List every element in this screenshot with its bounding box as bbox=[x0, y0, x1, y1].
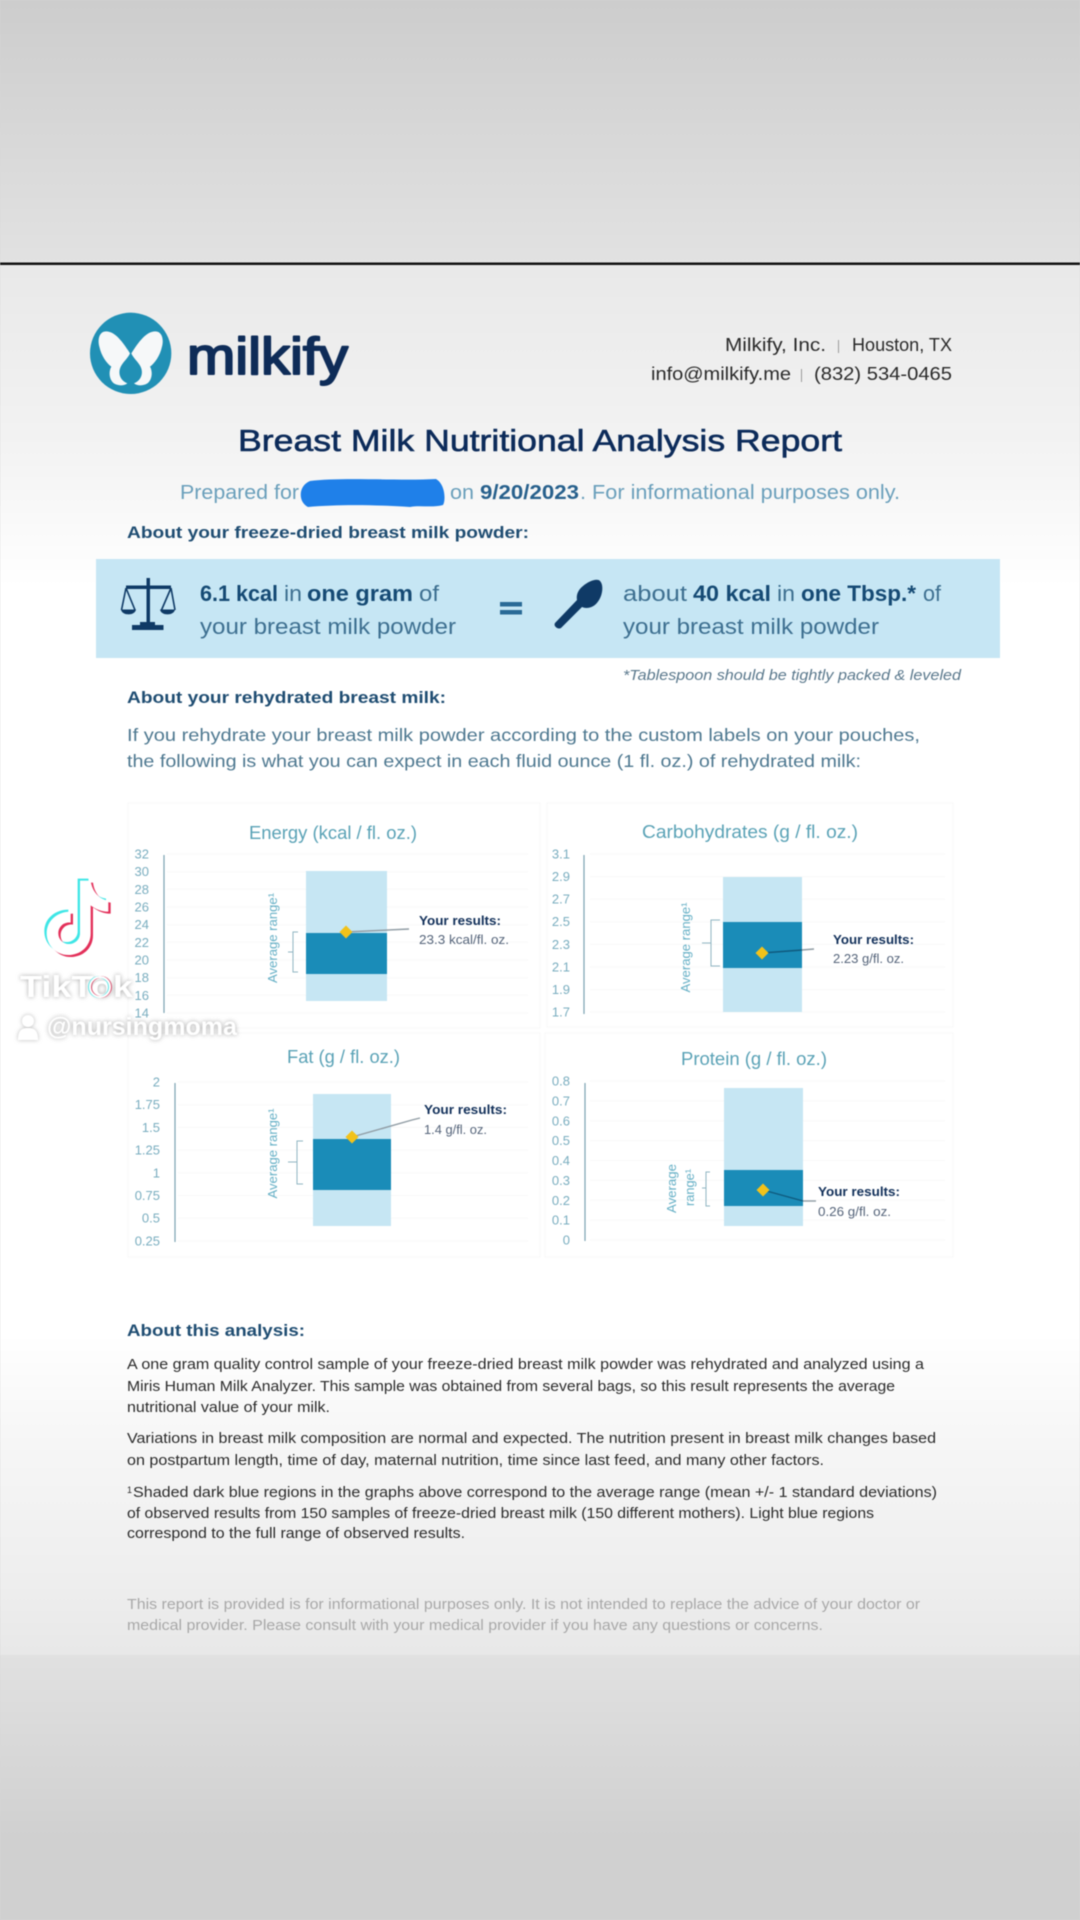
y axis labels bbox=[552, 846, 584, 1020]
text: per tablespoon: one Tbsp.* bbox=[801, 581, 916, 606]
TikTok wordmark: TikTok bbox=[20, 969, 134, 1004]
average range bar bbox=[723, 922, 802, 968]
average range label bbox=[266, 893, 298, 983]
panel: protein chart bbox=[545, 1033, 953, 1257]
your result marker bbox=[346, 1103, 507, 1144]
panel: energy chart bbox=[128, 803, 540, 1028]
y axis labels: 30 bbox=[135, 864, 149, 879]
heading: powder: About your freeze-dried breast milk powder: bbox=[127, 523, 529, 542]
average range label bbox=[679, 902, 720, 992]
analysis paragraph 2: on postpartum length, time of day, maternal nutrition, time since last feed, and many other factors. bbox=[127, 1453, 824, 1469]
prepared for line: 9/20/2023 bbox=[480, 482, 579, 504]
y axis labels bbox=[135, 1074, 175, 1248]
average range label: Average bbox=[665, 1164, 679, 1213]
y axis labels: 1.25 bbox=[135, 1142, 160, 1158]
y axis labels bbox=[135, 846, 164, 1020]
full range bar bbox=[313, 1094, 391, 1226]
y axis labels: 2.9 bbox=[552, 869, 570, 884]
your result marker bbox=[756, 933, 914, 966]
icon: TikTok o ring bbox=[89, 977, 111, 997]
y axis labels: 26 bbox=[135, 900, 149, 914]
contact details: Milkify, Inc. bbox=[725, 335, 826, 355]
icon: spoon bbox=[555, 580, 602, 629]
analysis footnote: correspond to the full range of observed results. bbox=[127, 1526, 465, 1542]
intro paragraph: the following is what you can expect in each fluid ounce (1 fl. oz.) of rehydrated milk: bbox=[127, 751, 861, 771]
tablespoon footnote: *Tablespoon should be tightly packed & leveled bbox=[623, 668, 962, 684]
intro paragraph: If you rehydrate your breast milk powder according to the custom labels on your pouches, bbox=[127, 725, 920, 745]
y axis labels: 3.1 bbox=[552, 846, 570, 862]
average range bar bbox=[724, 1170, 803, 1206]
disclaimer bbox=[127, 1597, 920, 1634]
prepared for line: on bbox=[450, 482, 474, 504]
y axis labels: 24 bbox=[135, 917, 149, 932]
y axis labels: 0.25 bbox=[135, 1234, 160, 1248]
average range label: range¹ bbox=[683, 1169, 697, 1206]
your result marker: Your results: bbox=[833, 933, 914, 947]
wordmark: milkify bbox=[187, 328, 348, 386]
y axis labels: 0.5 bbox=[552, 1133, 570, 1148]
contact details: info@milkify.me bbox=[651, 364, 791, 384]
text: per gram bbox=[200, 581, 456, 639]
text: per gram: your breast milk powder bbox=[200, 614, 456, 639]
text: per gram: of bbox=[419, 581, 440, 606]
y axis labels: 14 bbox=[135, 1006, 149, 1020]
chart title: Fat (g / fl. oz.) bbox=[287, 1047, 400, 1067]
y axis labels: 0.4 bbox=[552, 1153, 570, 1168]
y axis labels: 20 bbox=[135, 952, 149, 968]
panel: carbohydrates chart bbox=[547, 803, 953, 1027]
analysis footnote: Shaded dark blue regions in the graphs above correspond to the average range (mean +/- 1 standard deviations) bbox=[133, 1485, 937, 1501]
icon: scales bbox=[121, 578, 175, 630]
text: per gram: 6.1 kcal bbox=[200, 581, 278, 606]
your result marker: 1.4 g/fl. oz. bbox=[424, 1123, 487, 1137]
y axis labels: 2.7 bbox=[552, 892, 570, 906]
contact details: (832) 534-0465 bbox=[814, 364, 952, 384]
y axis labels: 16 bbox=[135, 988, 149, 1003]
top gray band bbox=[0, 0, 1080, 263]
your result marker bbox=[756, 1184, 900, 1219]
analysis footnote: of observed results from 150 samples of freeze-dried breast milk (150 different mothers). Light blue regions bbox=[127, 1506, 874, 1522]
y axis labels: 1 bbox=[153, 1166, 160, 1180]
average range label: Average range¹ bbox=[679, 903, 693, 992]
full range bar bbox=[724, 1088, 803, 1226]
text: per tablespoon: your breast milk powder bbox=[623, 614, 879, 639]
chart title: Energy (kcal / fl. oz.) bbox=[249, 823, 417, 843]
analysis footnote: 1 bbox=[127, 1485, 132, 1495]
text: per tablespoon bbox=[623, 581, 942, 639]
analysis paragraph 2: Variations in breast milk composition are normal and expected. The nutrition present in breast milk changes based bbox=[127, 1431, 936, 1447]
text: per gram: one gram bbox=[307, 581, 413, 606]
prepared for line bbox=[180, 479, 900, 507]
your result marker bbox=[340, 914, 509, 947]
your result marker: Your results: bbox=[424, 1103, 507, 1117]
bottom gray band bbox=[0, 1655, 1080, 1920]
title: Breast Milk Nutritional Analysis Report bbox=[238, 423, 842, 458]
y axis labels: 2 bbox=[153, 1074, 160, 1090]
y axis labels: 0.3 bbox=[552, 1173, 570, 1188]
chart title: Carbohydrates (g / fl. oz.) bbox=[642, 822, 858, 842]
contact details: Houston, TX bbox=[852, 335, 952, 355]
document page background bbox=[0, 265, 1080, 1655]
analysis paragraph 1: nutritional value of your milk. bbox=[127, 1400, 330, 1416]
y axis labels: 2.5 bbox=[552, 914, 570, 929]
y axis labels: 32 bbox=[135, 846, 149, 862]
analysis paragraph 1 bbox=[127, 1357, 925, 1416]
full range bar bbox=[306, 871, 387, 1001]
text: per tablespoon: of bbox=[923, 581, 942, 606]
average range label: Average range¹ bbox=[266, 893, 280, 983]
average range label bbox=[665, 1164, 710, 1213]
average range bar bbox=[306, 933, 387, 974]
text: per tablespoon: in bbox=[777, 581, 795, 606]
analysis paragraph 1: A one gram quality control sample of your freeze-dried breast milk powder was rehydrated and analyzed using a bbox=[127, 1357, 925, 1373]
your result marker: 23.3 kcal/fl. oz. bbox=[419, 933, 509, 947]
your result marker: Your results: bbox=[419, 914, 501, 928]
average range label bbox=[266, 1108, 303, 1198]
y axis labels: 0.75 bbox=[135, 1188, 160, 1203]
y axis labels: 1.75 bbox=[135, 1097, 160, 1112]
chart title: Protein (g / fl. oz.) bbox=[681, 1049, 827, 1069]
average range label: Average range¹ bbox=[266, 1109, 280, 1198]
y axis labels: 1.9 bbox=[552, 982, 570, 997]
y axis labels: 0.5 bbox=[142, 1210, 160, 1226]
watermark: TikTok bbox=[18, 879, 238, 1041]
icon: TikTok note bbox=[44, 879, 111, 957]
panel: fat chart bbox=[128, 1033, 540, 1257]
prepared for line: Prepared for bbox=[180, 482, 299, 504]
top black rule bbox=[0, 262, 1080, 265]
icon: user bbox=[18, 1015, 38, 1040]
y axis labels: 0.8 bbox=[552, 1074, 570, 1088]
icon: equals sign bbox=[500, 602, 522, 614]
y axis labels: 1.7 bbox=[552, 1004, 570, 1020]
full range bar bbox=[723, 877, 802, 1012]
y axis labels: 0 bbox=[563, 1232, 570, 1248]
analysis paragraph 2 bbox=[127, 1431, 936, 1469]
icon: butterfly circle bbox=[90, 313, 171, 394]
y axis labels: 0.2 bbox=[552, 1193, 570, 1208]
disclaimer: medical provider. Please consult with your medical provider if you have any questions or concerns. bbox=[127, 1618, 823, 1634]
analysis footnote bbox=[127, 1485, 937, 1542]
your result marker: Your results: bbox=[818, 1185, 900, 1199]
disclaimer: This report is provided is for informational purposes only. It is not intended to replace the advice of your doctor or bbox=[127, 1597, 920, 1613]
text: per tablespoon: 40 kcal bbox=[693, 581, 771, 606]
redaction scribble bbox=[301, 479, 445, 507]
y axis labels: 0.7 bbox=[552, 1094, 570, 1108]
y axis labels bbox=[552, 1074, 585, 1248]
text: per gram: in bbox=[284, 581, 302, 606]
y axis labels: 0.1 bbox=[552, 1212, 570, 1228]
heading: rehydrated: About your rehydrated breast milk: bbox=[127, 688, 446, 707]
text: per tablespoon: about bbox=[623, 581, 687, 606]
y axis labels: 0.6 bbox=[552, 1114, 570, 1128]
y axis labels: 2.3 bbox=[552, 937, 570, 952]
y axis labels: 18 bbox=[135, 970, 149, 985]
your result marker: 2.23 g/fl. oz. bbox=[833, 952, 904, 966]
intro paragraph bbox=[127, 725, 920, 771]
y axis labels: 28 bbox=[135, 882, 149, 897]
username: @nursingmoma bbox=[47, 1013, 238, 1041]
y axis labels: 22 bbox=[135, 935, 149, 950]
y axis labels: 2.1 bbox=[552, 960, 570, 974]
heading: about this analysis: About this analysis: bbox=[127, 1321, 305, 1340]
contact details bbox=[651, 335, 952, 384]
average range bar bbox=[313, 1139, 391, 1190]
your result marker: 0.26 g/fl. oz. bbox=[818, 1205, 891, 1219]
y axis labels: 1.5 bbox=[142, 1120, 160, 1135]
prepared for line: . For informational purposes only. bbox=[580, 482, 900, 504]
panel: powder equivalence band bbox=[96, 559, 1000, 658]
logo: milkify bbox=[90, 313, 348, 394]
analysis paragraph 1: Miris Human Milk Analyzer. This sample was obtained from several bags, so this result represents the average bbox=[127, 1379, 895, 1395]
